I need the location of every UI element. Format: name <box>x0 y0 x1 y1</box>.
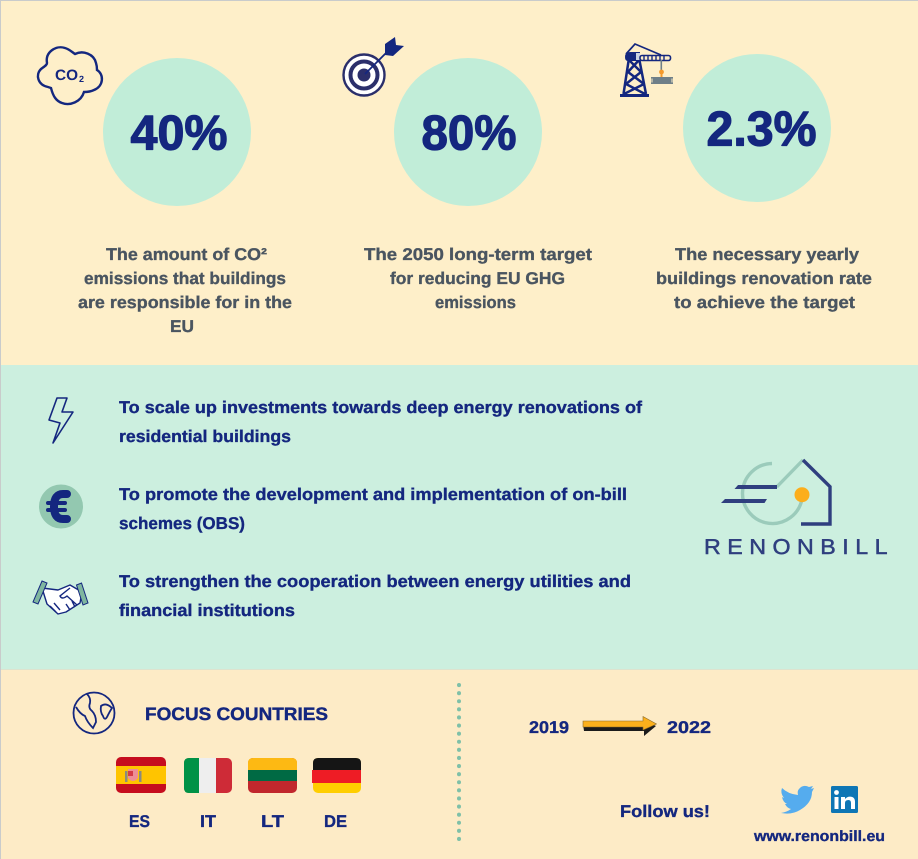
follow us label: Follow us! <box>620 802 710 821</box>
flag: Spain <box>116 757 166 793</box>
objective: cooperation: financial institutions <box>119 601 295 620</box>
circle with value 40% <box>103 58 251 206</box>
logo: RENONBILL <box>704 460 894 559</box>
country code labels: IT <box>200 812 217 831</box>
objective: scale up investments: To scale up investments towards deep energy renovations of <box>119 398 642 417</box>
circle with value 2.3%: 2.3% <box>706 102 816 156</box>
panel: key statistics <box>38 37 872 336</box>
objective: on-bill schemes <box>119 485 627 533</box>
country code labels: LT <box>261 812 285 831</box>
panel: focus countries and project info <box>1 669 918 859</box>
statistic: 2.3% <box>620 44 872 312</box>
circle with value 80% <box>394 58 542 206</box>
timeline: 2019 to 2022 <box>529 716 711 737</box>
statistic: 80% <box>344 37 592 312</box>
description: 40% <box>78 245 292 336</box>
icon: Twitter bird <box>781 786 814 814</box>
description: 2.3%: buildings renovation rate <box>656 269 872 288</box>
icon: target with arrow <box>344 37 404 96</box>
flag: Lithuania <box>248 758 297 793</box>
circle with value 40%: 40% <box>130 106 228 160</box>
circle with value 80%: 80% <box>422 106 516 160</box>
country code labels: DE <box>324 812 347 831</box>
flag: Italy <box>184 758 232 793</box>
icon: CO2 cloud <box>38 47 102 104</box>
icon: lightning bolt <box>49 398 73 443</box>
description: 2.3%: to achieve the target <box>674 293 855 312</box>
objective: cooperation <box>119 572 631 620</box>
description: 80%: emissions <box>435 293 516 312</box>
website link: www.renonbill.eu <box>753 828 885 845</box>
objective: scale up investments <box>119 398 642 446</box>
description: 40%: The amount of CO² <box>106 245 267 264</box>
circle with value 2.3% <box>683 54 831 202</box>
logo: RENONBILL: RENONBILL <box>704 535 894 559</box>
objective: scale up investments: residential buildings <box>119 427 291 446</box>
description: 40%: are responsible for in the <box>78 293 292 312</box>
description: 80%: The 2050 long-term target <box>364 245 592 264</box>
icon: globe <box>74 692 114 734</box>
icon: CO2 cloud: 2 <box>79 74 84 84</box>
flag: Germany <box>312 758 361 793</box>
icon: LinkedIn <box>831 786 858 813</box>
objective: cooperation: To strengthen the cooperation between energy utilities and <box>119 572 631 591</box>
statistic: 40% <box>38 47 292 336</box>
icon: construction crane <box>620 44 673 97</box>
description: 80%: for reducing EU GHG <box>390 269 565 288</box>
description: 2.3%: The necessary yearly <box>675 245 860 264</box>
panel: objectives <box>1 365 918 669</box>
description: 40%: EU <box>170 317 194 336</box>
objective: on-bill schemes: To promote the development and implementation of on-bill <box>119 485 627 504</box>
description: 2.3% <box>656 245 872 312</box>
timeline: 2019 to 2022: 2019 <box>529 718 569 737</box>
icon: handshake <box>33 581 88 614</box>
timeline: 2019 to 2022: 2022 <box>667 718 711 737</box>
objective: on-bill schemes: schemes (OBS) <box>119 514 245 533</box>
icon: euro coin <box>39 484 83 528</box>
country code labels <box>129 812 347 831</box>
description: 40%: emissions that buildings <box>84 269 286 288</box>
heading: focus countries: FOCUS COUNTRIES <box>145 704 328 724</box>
icon: CO2 cloud: CO <box>55 67 78 84</box>
country code labels: ES <box>129 812 150 831</box>
description: 80% <box>364 245 592 312</box>
